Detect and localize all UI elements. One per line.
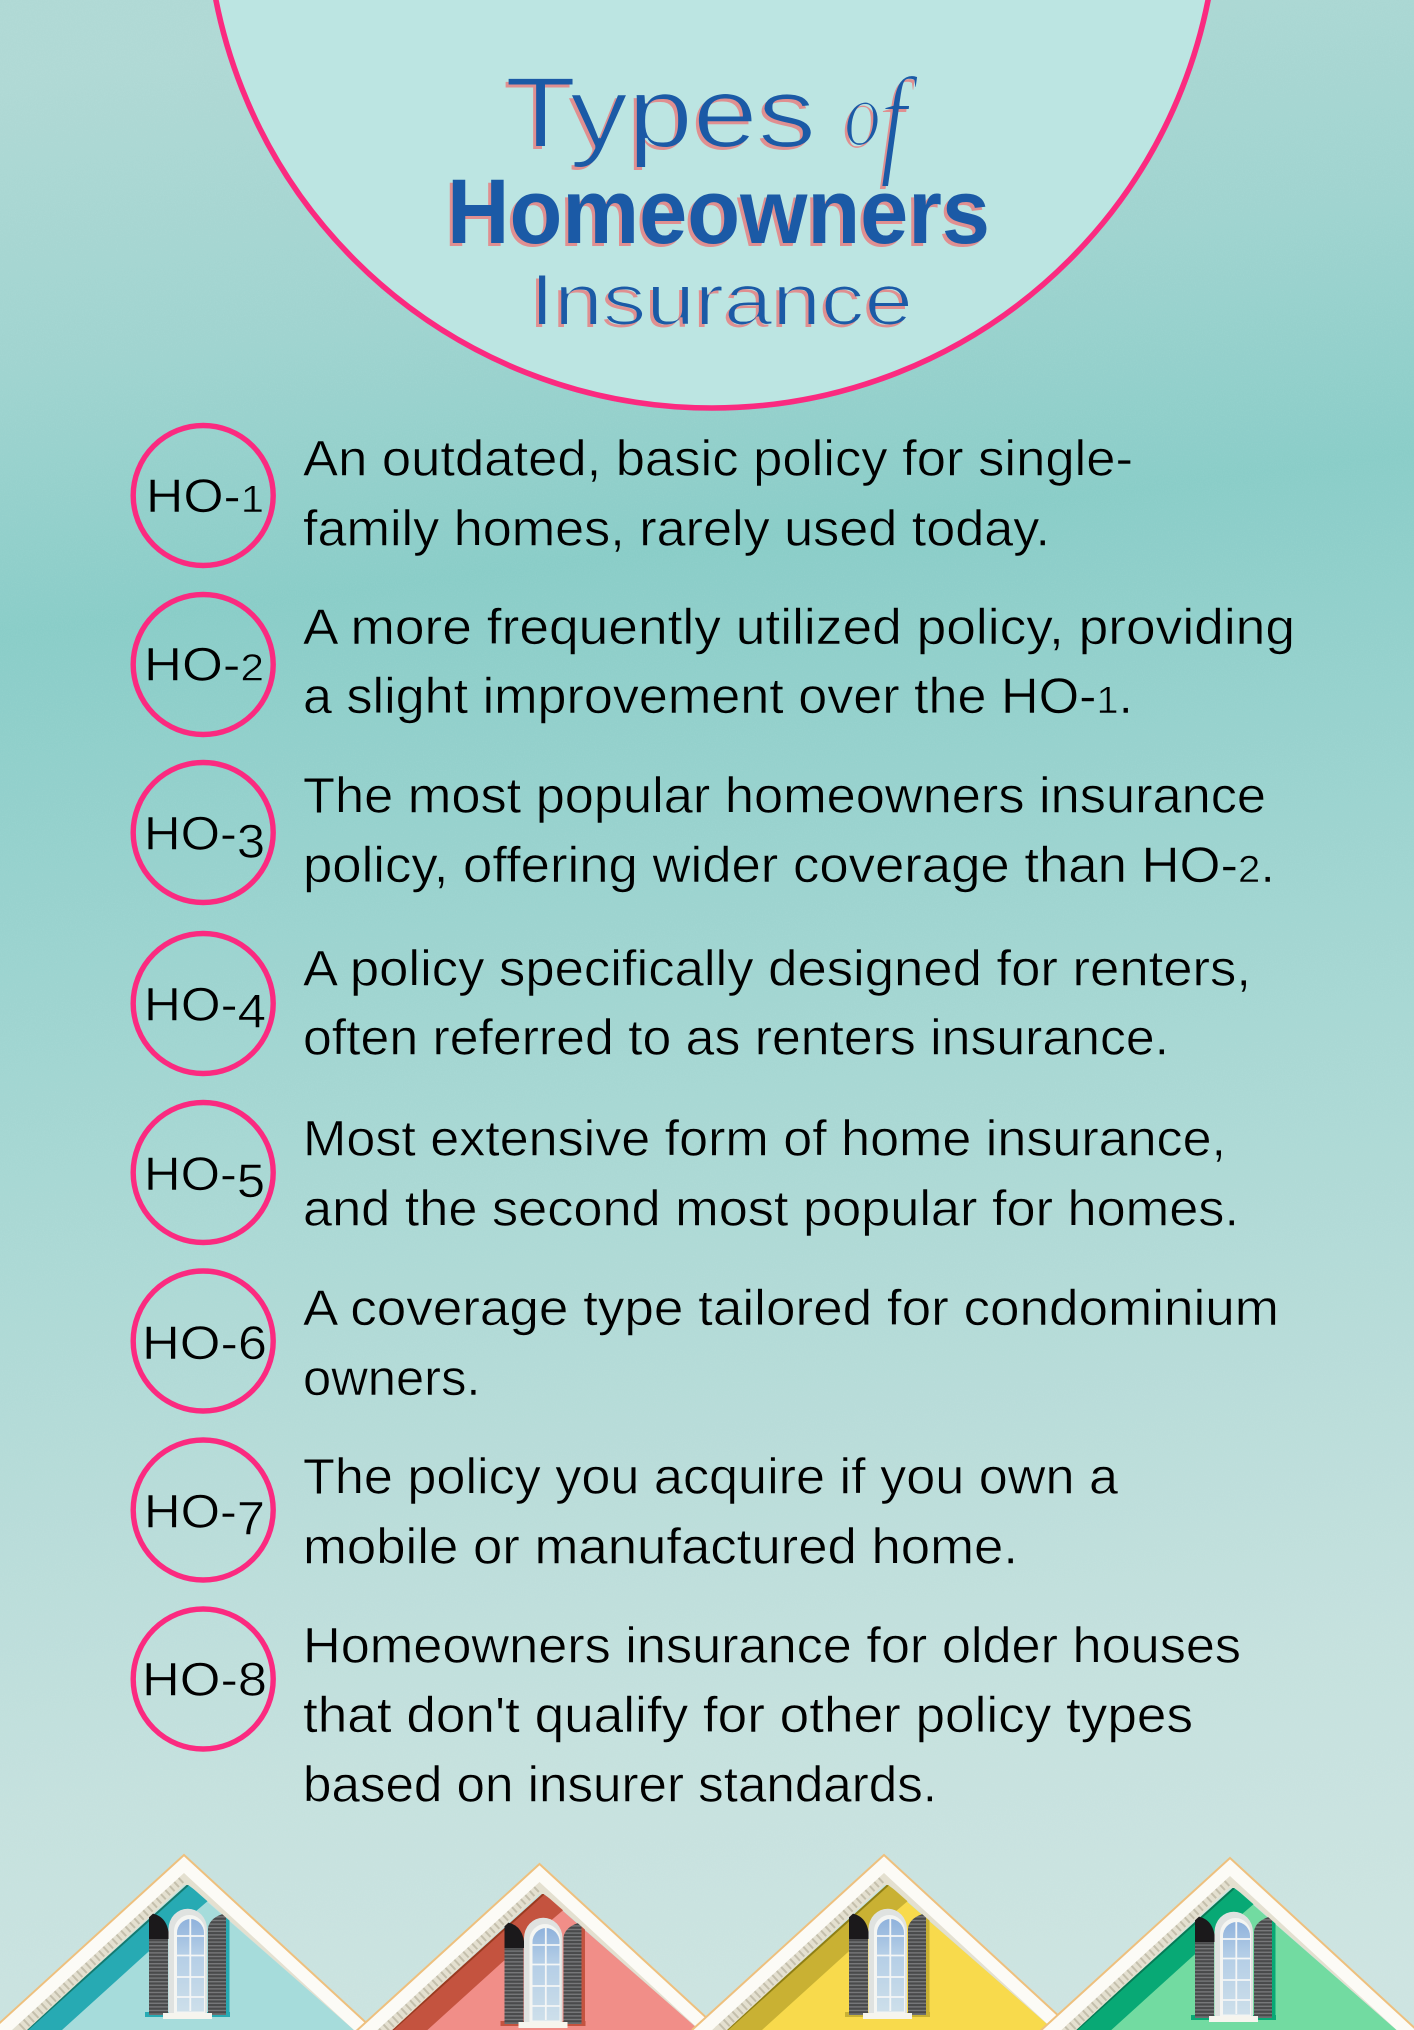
- badge HO-1: [133, 426, 273, 566]
- description HO-8: based on insurer standards.: [303, 1757, 937, 1813]
- house: yellow: [692, 1855, 1074, 2030]
- badge HO-7: [133, 1440, 273, 1580]
- house: teal: [0, 1855, 374, 2030]
- badge HO-3: HO-: [144, 806, 230, 859]
- badge HO-3: [133, 762, 273, 902]
- badge HO-2: HO- 2: [144, 638, 264, 691]
- description HO-7: [303, 1448, 1118, 1574]
- row HO-1: [133, 426, 1133, 566]
- description HO-8: that don't qualify for other policy types: [303, 1687, 1193, 1743]
- house roofs strip: [0, 1855, 1414, 2030]
- badge HO-4: [133, 934, 273, 1074]
- description HO-2: a slight improvement over the HO- 1.: [303, 668, 1133, 724]
- description HO-1: family homes, rarely used today.: [303, 501, 1050, 557]
- row HO-6: [133, 1271, 1279, 1411]
- house: pink: [348, 1864, 730, 2030]
- description HO-1: [303, 431, 1133, 557]
- title word: of: f: [880, 53, 919, 188]
- title line: Insurance: Insurance: [530, 260, 913, 341]
- description HO-3: [303, 767, 1275, 893]
- badge HO-5: [133, 1102, 273, 1242]
- description HO-7: The policy you acquire if you own a: [303, 1448, 1118, 1504]
- title word: of: o: [844, 64, 881, 166]
- description HO-4: often referred to as renters insurance.: [303, 1010, 1169, 1066]
- description HO-5: and the second most popular for homes.: [303, 1181, 1239, 1237]
- badge HO-4: 4: [238, 985, 266, 1038]
- row HO-7: [133, 1440, 1118, 1580]
- badge HO-5: HO-: [144, 1147, 230, 1200]
- description HO-5: Most extensive form of home insurance,: [303, 1111, 1226, 1167]
- row HO-3: [133, 762, 1275, 902]
- description HO-3: The most popular homeowners insurance: [303, 767, 1266, 823]
- badge HO-7: 7: [237, 1492, 265, 1545]
- badge HO-1: HO-1: [146, 469, 264, 522]
- description HO-7: mobile or manufactured home.: [303, 1518, 1018, 1574]
- description HO-1: An outdated, basic policy for single-: [303, 431, 1133, 487]
- description HO-6: [303, 1280, 1279, 1406]
- description HO-8: [303, 1618, 1241, 1813]
- badge HO-7: HO-: [144, 1485, 230, 1538]
- row HO-5: [133, 1102, 1239, 1242]
- badge HO-6: HO-6: [142, 1316, 267, 1369]
- description HO-5: [303, 1111, 1239, 1237]
- description HO-6: A coverage type tailored for condominium: [303, 1280, 1279, 1336]
- description HO-6: owners.: [303, 1350, 480, 1406]
- title: [447, 53, 990, 341]
- badge HO-6: [133, 1271, 273, 1411]
- badge HO-3: 3: [237, 814, 265, 867]
- house: green: [1038, 1858, 1414, 2030]
- description HO-2: A more frequently utilized policy, providing: [303, 599, 1295, 655]
- description HO-3: policy, offering wider coverage than HO- 2.: [303, 837, 1275, 893]
- badge HO-8: HO-8: [142, 1653, 267, 1706]
- description HO-4: A policy specifically designed for renters,: [303, 941, 1251, 997]
- row HO-8: [133, 1609, 1241, 1813]
- description HO-4: [303, 941, 1251, 1066]
- badge HO-2: [133, 594, 273, 734]
- row HO-4: [133, 934, 1251, 1074]
- badge HO-8: [133, 1609, 273, 1749]
- badge HO-4: HO-: [144, 978, 230, 1031]
- title line: Types: Types: [505, 57, 816, 169]
- description HO-2: [303, 599, 1295, 724]
- row HO-2: [133, 594, 1295, 734]
- title circle panel: [206, 0, 1218, 408]
- badge HO-5: 5: [237, 1154, 265, 1207]
- description HO-8: Homeowners insurance for older houses: [303, 1618, 1241, 1674]
- title line: Homeowners: Homeowners: [447, 161, 990, 263]
